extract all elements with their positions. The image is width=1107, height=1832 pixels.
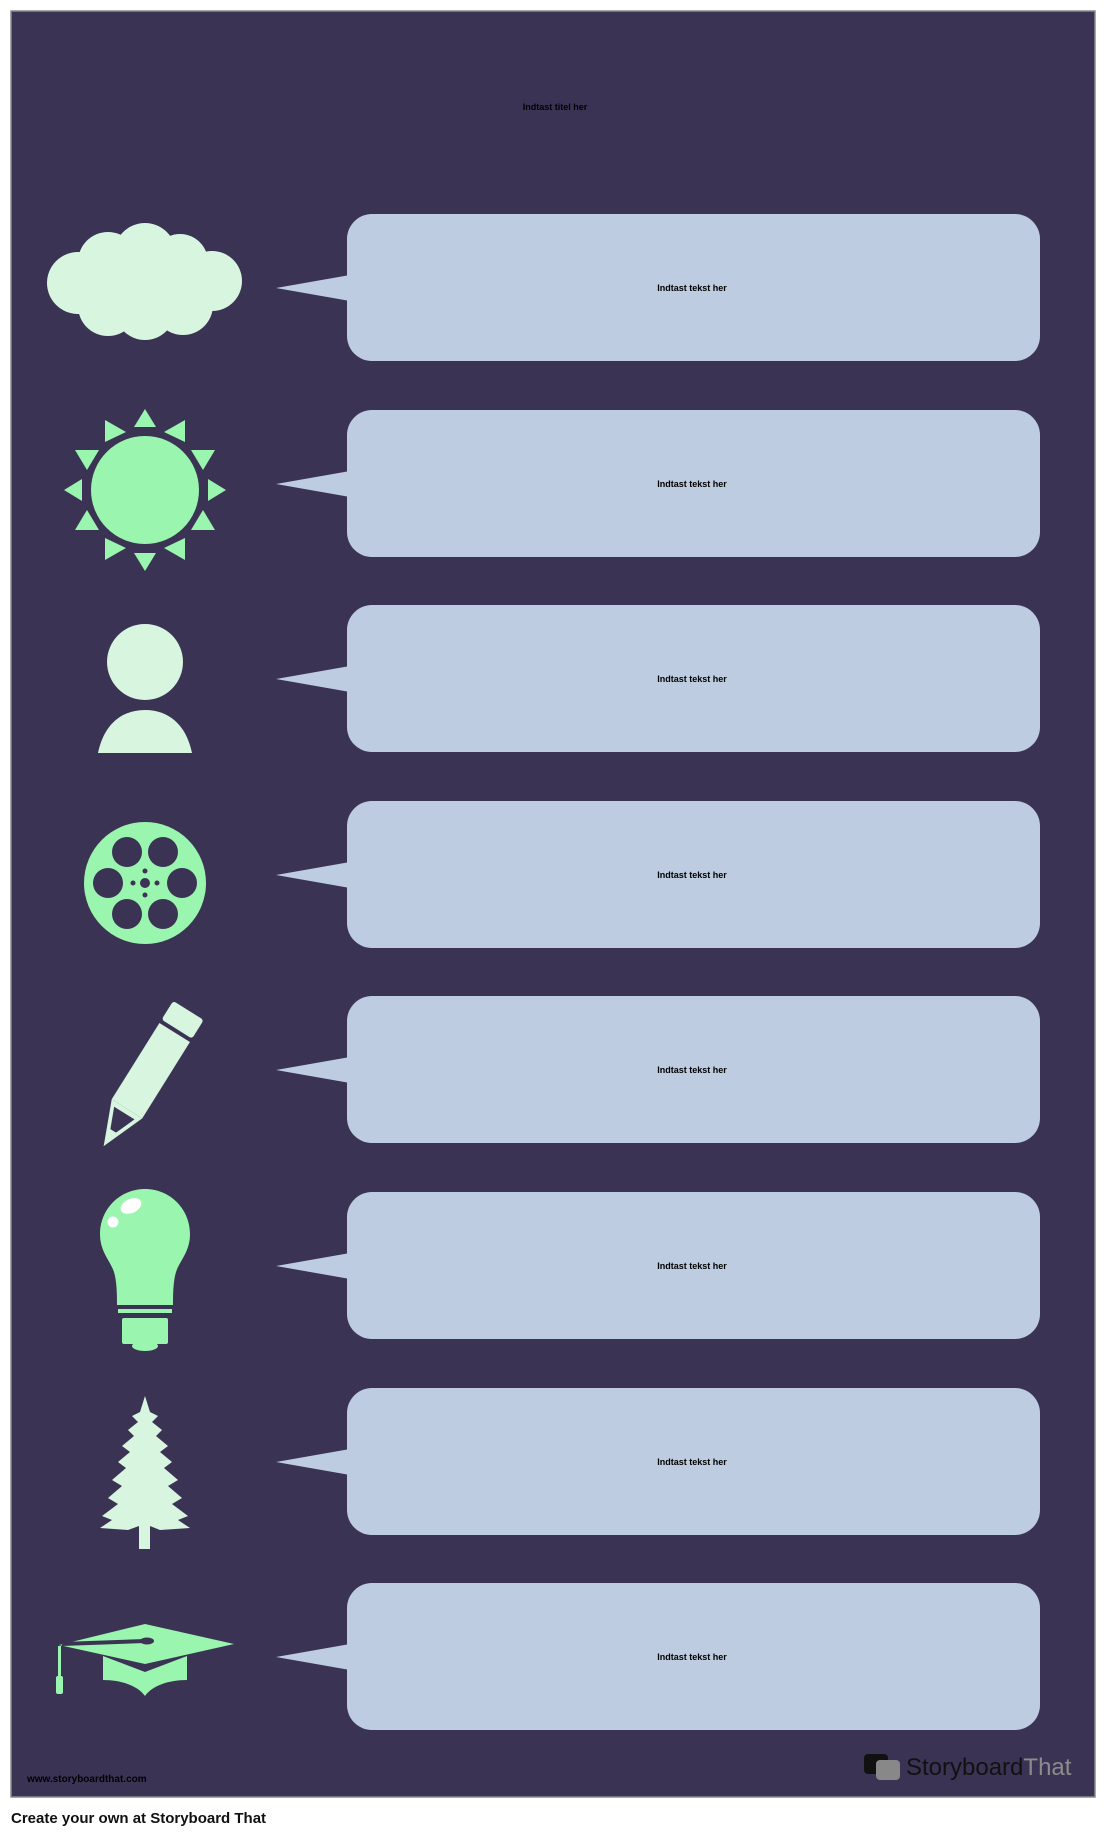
- callout 6: [276, 1192, 1040, 1339]
- icon: sun: [64, 409, 226, 571]
- callout 8: Indtast tekst her: [657, 1652, 727, 1662]
- footer caption: Create your own at Storyboard That: [11, 1810, 266, 1827]
- icon: graduation cap: [56, 1624, 234, 1696]
- callout 2: Indtast tekst her: [657, 479, 727, 489]
- icon: pine tree: [100, 1396, 190, 1549]
- icon: cloud: [47, 223, 242, 340]
- callout 1: Indtast tekst her: [657, 283, 727, 293]
- callout 3: Indtast tekst her: [657, 674, 727, 684]
- logo: Storyboard That: StoryboardThat: [906, 1754, 1072, 1781]
- callout 7: Indtast tekst her: [657, 1457, 727, 1467]
- icon: film reel: [84, 822, 206, 944]
- footer url: www.storyboardthat.com: [26, 1774, 147, 1785]
- icon: person: [98, 624, 192, 753]
- callout 8: [276, 1583, 1040, 1730]
- callout 4: [276, 801, 1040, 948]
- callout 3: [276, 605, 1040, 752]
- callout 7: [276, 1388, 1040, 1535]
- icon: pencil: [88, 1001, 204, 1156]
- icon: light bulb: [100, 1189, 190, 1351]
- callout 2: [276, 410, 1040, 557]
- callout 6: Indtast tekst her: [657, 1261, 727, 1271]
- callout 4: Indtast tekst her: [657, 870, 727, 880]
- callout 1: [276, 214, 1040, 361]
- callout 5: [276, 996, 1040, 1143]
- callout 5: Indtast tekst her: [657, 1065, 727, 1075]
- title: Indtast titel her: [523, 102, 588, 112]
